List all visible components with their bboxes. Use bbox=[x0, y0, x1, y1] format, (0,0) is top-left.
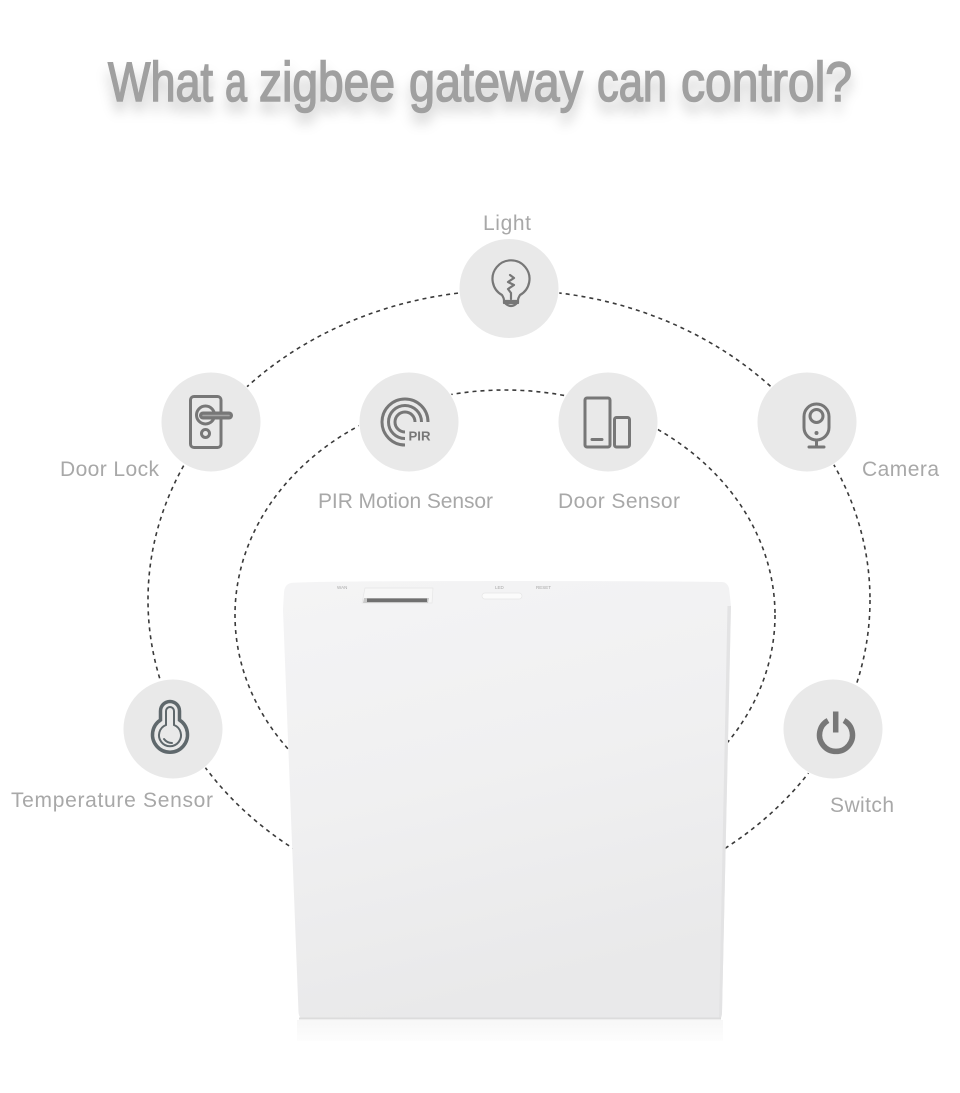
title: zigbee bbox=[259, 50, 395, 113]
title: can bbox=[597, 50, 667, 113]
icon: PIR sensor bbox=[382, 399, 431, 445]
device bottom edge bbox=[299, 1018, 721, 1020]
item: PIR Motion Sensor bbox=[318, 372, 493, 513]
USB port bbox=[362, 588, 433, 603]
label: Door Lock bbox=[60, 458, 160, 481]
title: control? bbox=[681, 50, 852, 113]
item: Door Sensor bbox=[558, 372, 680, 513]
icon: light bulb bbox=[492, 260, 530, 306]
circle bbox=[558, 372, 658, 472]
title: a bbox=[225, 50, 248, 113]
label: Switch bbox=[830, 794, 894, 817]
label: PIR Motion Sensor bbox=[318, 490, 493, 513]
item: Door Lock bbox=[60, 372, 261, 481]
icon: door sensor bbox=[585, 398, 630, 447]
title: What bbox=[108, 50, 213, 113]
title: gateway bbox=[409, 50, 583, 113]
label: Door Sensor bbox=[558, 490, 680, 513]
icon: door lock bbox=[190, 396, 229, 448]
icon: thermometer bbox=[152, 702, 187, 752]
reset button bbox=[482, 593, 522, 599]
circle bbox=[783, 679, 883, 779]
label: Temperature Sensor bbox=[11, 789, 213, 812]
title bbox=[108, 50, 852, 113]
label: Camera bbox=[862, 458, 939, 481]
circle bbox=[161, 372, 261, 472]
device reflection bbox=[297, 1020, 723, 1041]
device right edge bbox=[719, 606, 731, 1019]
item: Temperature Sensor bbox=[11, 679, 223, 812]
circle bbox=[123, 679, 223, 779]
icon: power bbox=[820, 712, 853, 751]
port label WAN: WAN bbox=[337, 585, 347, 590]
gateway device bbox=[283, 581, 731, 1041]
circle bbox=[757, 372, 857, 472]
port label LED: LED bbox=[495, 585, 505, 590]
item: Camera bbox=[757, 372, 939, 481]
item: Switch bbox=[783, 679, 894, 817]
circle bbox=[459, 238, 559, 338]
item: Light bbox=[459, 212, 559, 338]
arcs bbox=[382, 399, 428, 445]
device body bbox=[283, 581, 731, 1019]
circle bbox=[359, 372, 459, 472]
label: Light bbox=[483, 212, 531, 235]
inner dashed connection ring bbox=[235, 390, 775, 840]
PIR text: PIR bbox=[408, 428, 431, 444]
port label RESET: RESET bbox=[536, 585, 551, 590]
icon: camera bbox=[804, 404, 829, 447]
outer dashed connection ring bbox=[148, 290, 870, 910]
